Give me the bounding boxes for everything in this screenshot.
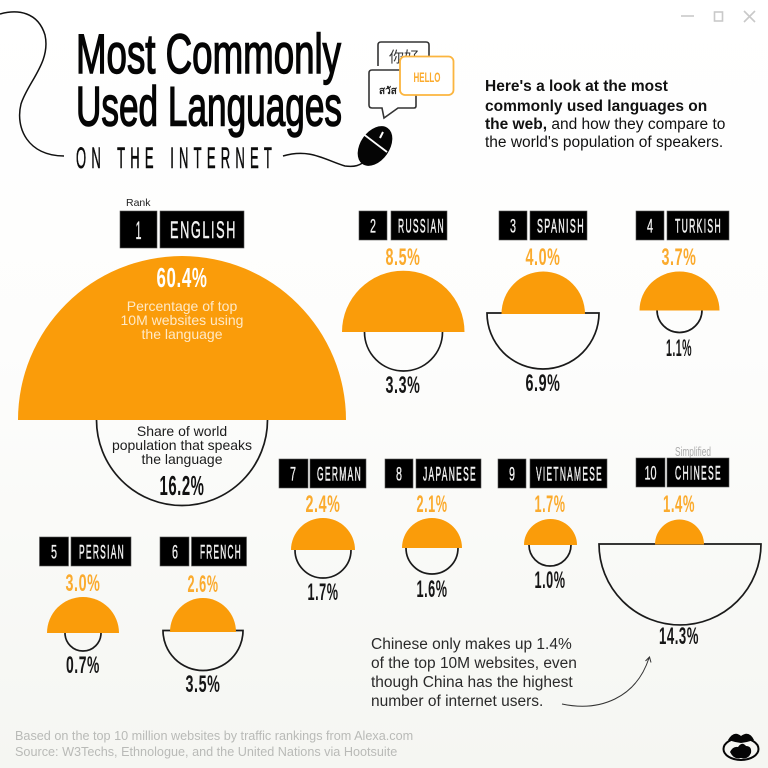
panel: German, rank 7: 7 [290, 464, 296, 486]
panel: Turkish, rank 4: 1.1% [666, 335, 692, 362]
title [76, 22, 342, 175]
intro text: the world's population of speakers. [485, 134, 723, 151]
panel: Spanish, rank 3: SPANISH [537, 216, 585, 238]
rank caption: Rank [126, 197, 151, 209]
website half circle [18, 256, 346, 420]
panel: Simplified Chinese, rank 10: Simplified [675, 444, 711, 459]
panel: Persian, rank 5: 5 [51, 542, 57, 564]
panel: Vietnamese, rank 9: 1.0% [534, 567, 566, 594]
panel: Russian, rank 2 [342, 211, 464, 399]
panel: Spanish, rank 3 [487, 211, 599, 397]
panel: Persian, rank 5: 0.7% [66, 652, 100, 679]
arrow: note to Chinese [562, 657, 651, 706]
panel: Persian, rank 5: 3.0% [66, 570, 100, 597]
panel: German, rank 7 [279, 459, 366, 606]
text: FRENCH [200, 542, 242, 564]
icon: speech bubbles [369, 42, 454, 118]
panel: Russian, rank 2: RUSSIAN [398, 216, 445, 238]
panel: Japanese, rank 8 [385, 459, 481, 603]
panel: Vietnamese, rank 9: 9 [509, 464, 515, 486]
population share: 16.2% [160, 470, 204, 501]
logo [724, 734, 758, 760]
panel: Japanese, rank 8: 1.6% [416, 576, 448, 603]
panel: Russian, rank 2: 3.3% [386, 372, 420, 399]
panel: Spanish, rank 3: 3 [510, 216, 516, 238]
website share: 60.4% [156, 262, 208, 293]
title: Most Commonly [76, 22, 341, 85]
panel: French, rank 6: 3.5% [186, 671, 220, 698]
rank and name label: ENGLISH [170, 217, 237, 244]
panel: Japanese, rank 8: 2.1% [416, 491, 448, 518]
panel: Turkish, rank 4: 3.7% [662, 244, 696, 271]
population caption: the language [142, 451, 223, 467]
intro text: Here's a look at the most [485, 78, 668, 95]
icon: speech bubbles: HELLO [414, 69, 441, 85]
icon: speech bubbles: 你好 [389, 49, 419, 66]
title: ON THE INTERNET [76, 142, 277, 175]
window controls [681, 11, 755, 22]
panel: Spanish, rank 3: 4.0% [526, 244, 560, 271]
callout: Chinese note: number of internet users. [371, 693, 543, 710]
panel: Spanish, rank 3: 6.9% [526, 370, 560, 397]
panel: Russian, rank 2: 2 [370, 216, 376, 238]
text: VIETNAMESE [536, 464, 603, 486]
website share caption: Percentage of top [127, 298, 237, 314]
panel: Turkish, rank 4: 4 [647, 216, 653, 238]
panel: Russian, rank 2: 8.5% [386, 244, 420, 271]
title: Used Languages [76, 74, 342, 138]
source note [15, 729, 413, 759]
text: GERMAN [317, 464, 362, 486]
callout: Chinese note [371, 636, 577, 710]
intro text: the web, and how they compare to [485, 116, 725, 133]
rank and name label: 1 [136, 217, 142, 245]
population caption: population that speaks [112, 437, 252, 453]
population caption: Share of world [137, 423, 227, 439]
population caption [112, 423, 252, 467]
panel: French, rank 6: 6 [172, 542, 178, 564]
panel: Persian, rank 5 [40, 537, 131, 679]
panel: Simplified Chinese, rank 10: 14.3% [659, 623, 699, 650]
panel: French, rank 6 [160, 537, 246, 698]
panel: Japanese, rank 8: 8 [396, 464, 402, 486]
icon: computer mouse [351, 120, 399, 172]
panel: Vietnamese, rank 9: 1.7% [534, 491, 566, 518]
panel: Turkish, rank 4 [636, 211, 729, 362]
intro text [485, 78, 725, 151]
rank and name label [120, 211, 244, 248]
panel: Vietnamese, rank 9 [498, 459, 607, 594]
panel: French, rank 6: 2.6% [188, 571, 218, 598]
callout: Chinese note: though China has the highest [371, 674, 573, 691]
panel: German, rank 7: 1.7% [308, 579, 338, 606]
panel: Simplified Chinese, rank 10: 1.4% [663, 491, 695, 518]
text: PERSIAN [79, 542, 125, 564]
source note: Source: W3Techs, Ethnologue, and the United Nations via Hootsuite [15, 745, 397, 759]
callout: Chinese note: of the top 10M websites, even [371, 655, 577, 672]
panel: Simplified Chinese, rank 10: 10 [644, 462, 657, 484]
intro text: commonly used languages on [485, 98, 707, 115]
population half circle [96, 420, 268, 506]
website share caption: 10M websites using [121, 312, 243, 328]
callout: Chinese note: Chinese only makes up 1.4% [371, 636, 572, 653]
icon: speech bubbles: สวัส [379, 85, 398, 97]
website share caption: the language [142, 326, 223, 342]
text: JAPANESE [423, 464, 477, 486]
panel: English, rank 1 [18, 197, 346, 506]
source note: Based on the top 10 million websites by traffic rankings from Alexa.com [15, 729, 413, 743]
website share caption [121, 298, 243, 342]
decorative cable from title to mouse [0, 12, 368, 166]
panel: German, rank 7: 2.4% [306, 491, 340, 518]
panel: Simplified Chinese, rank 10 [599, 444, 761, 650]
